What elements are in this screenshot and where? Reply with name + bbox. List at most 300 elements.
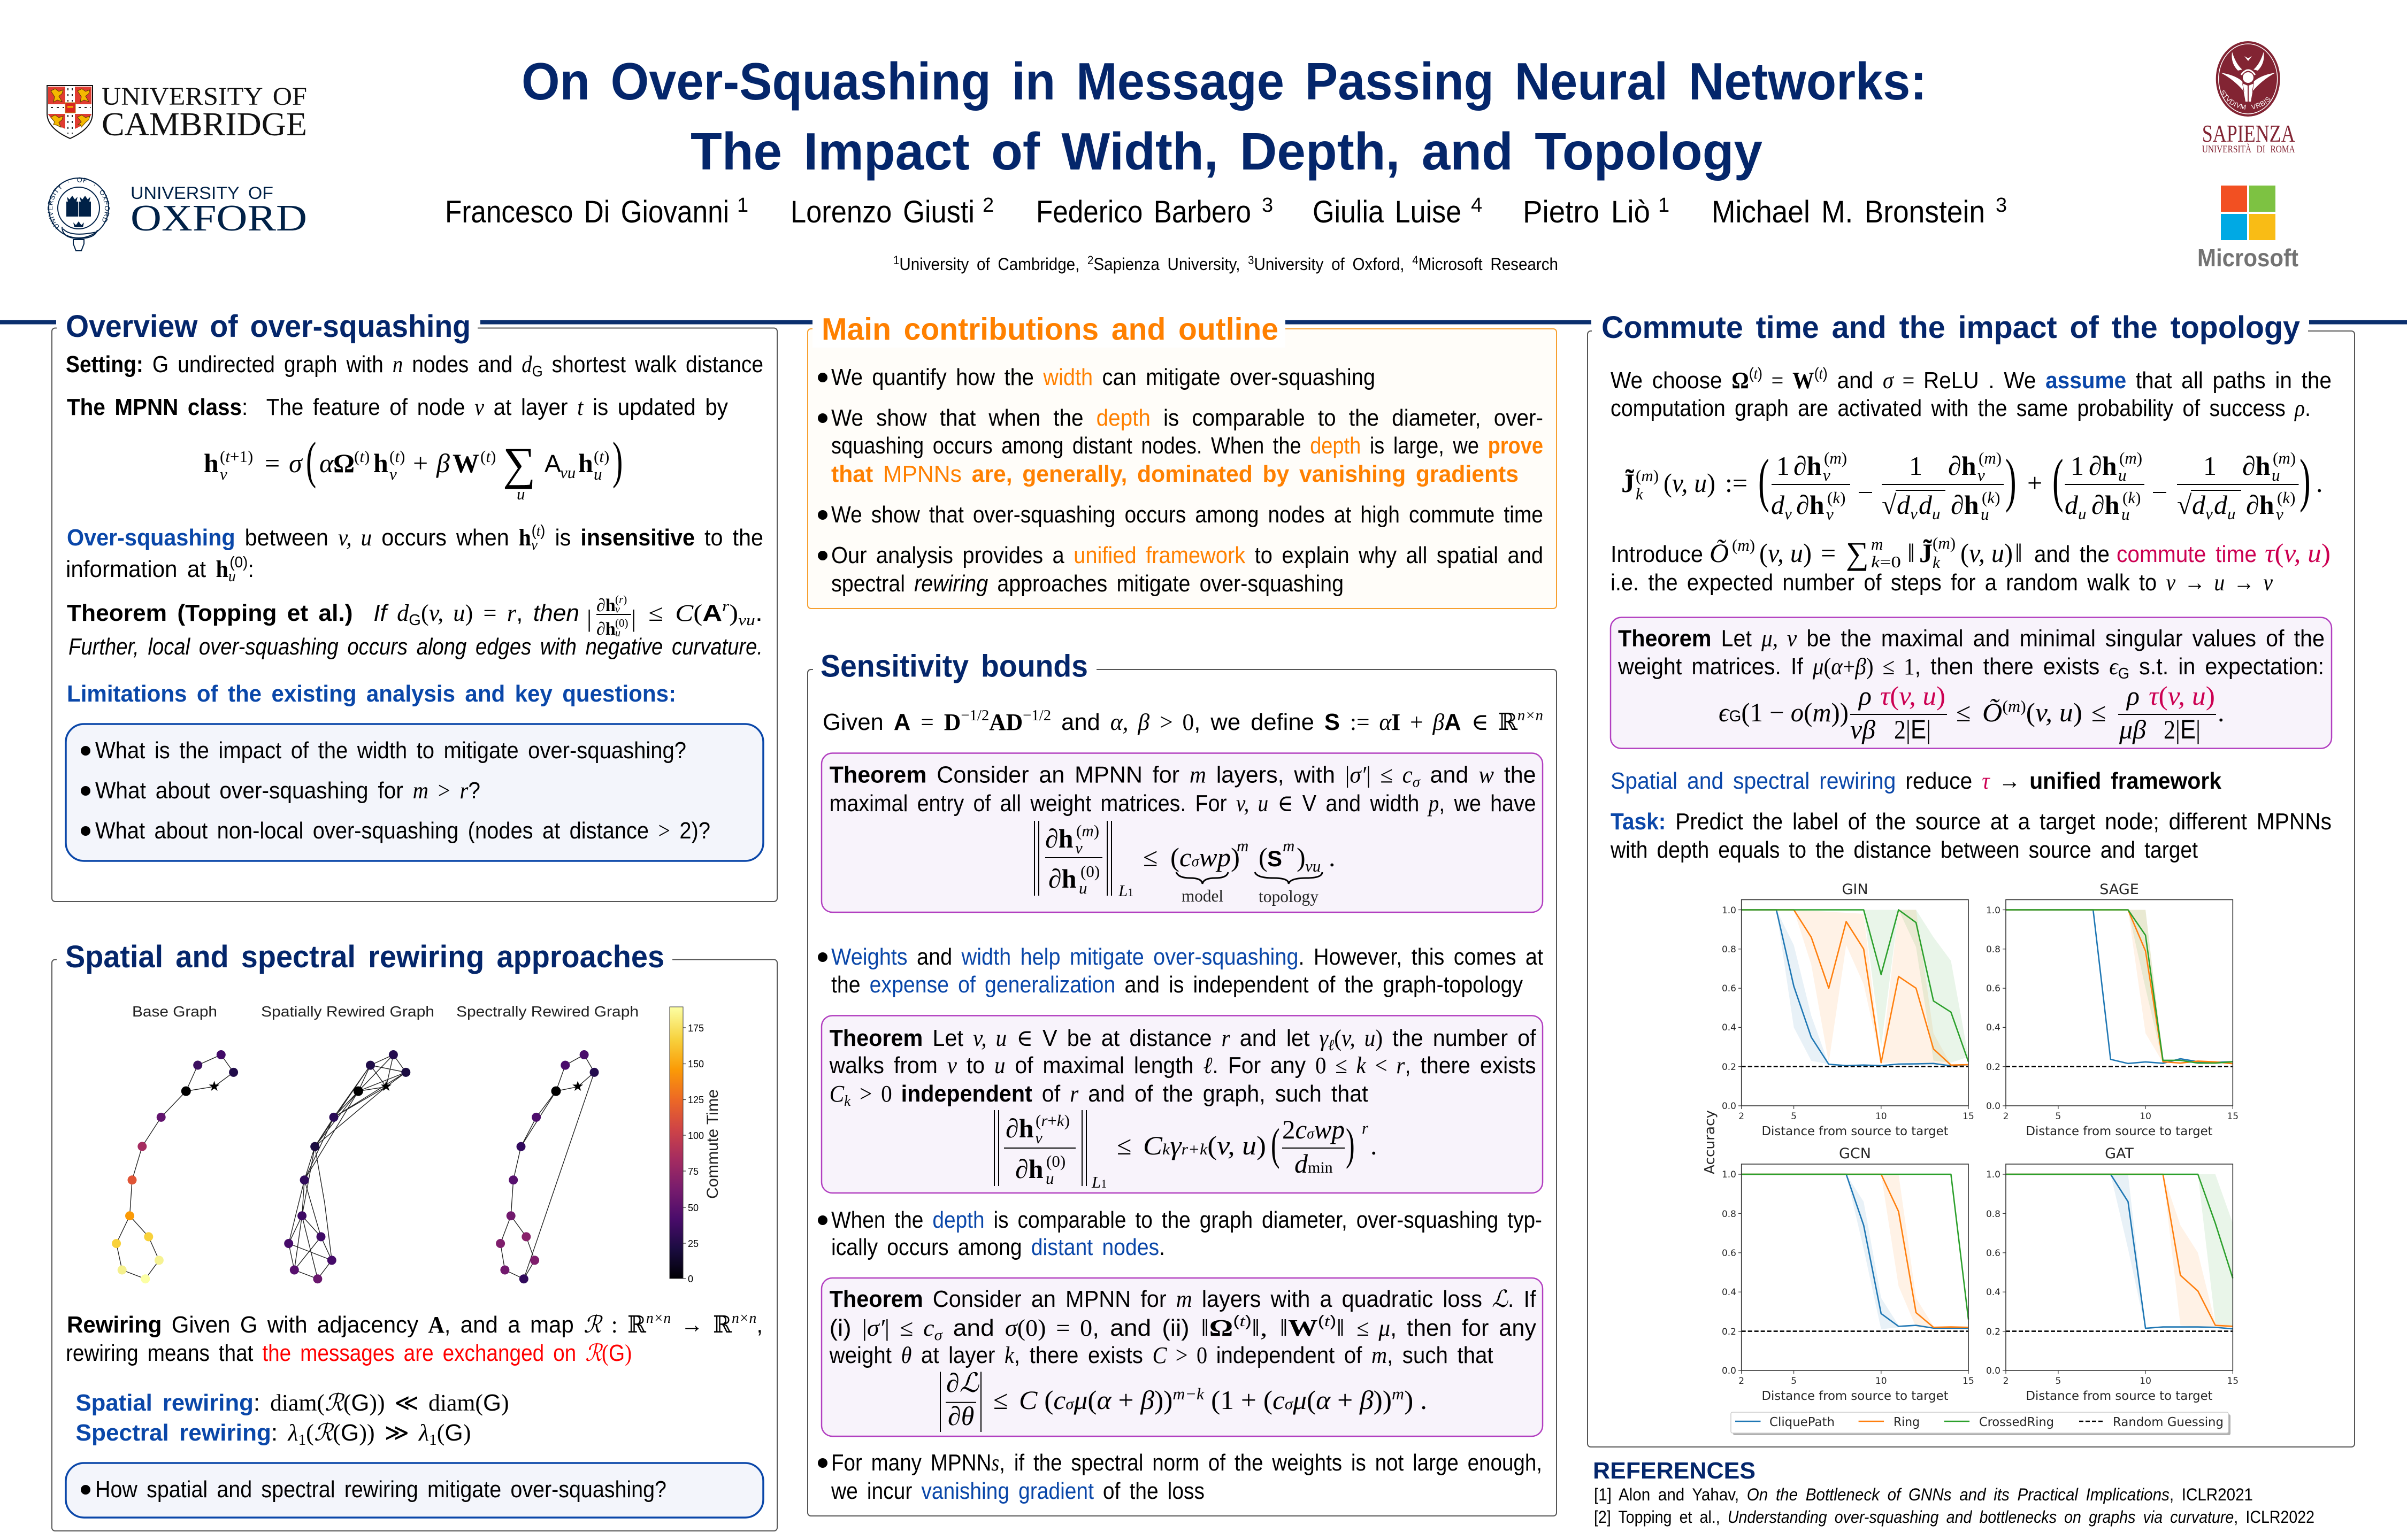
text: theorem of Topping et al.: Theorem (Topping et al.) If dG(v, u) = r, then xyxy=(67,600,579,629)
title: The Impact of Width, Depth, and Topology xyxy=(691,122,1762,181)
formula: symmetrized jacobian: v xyxy=(1910,504,1918,523)
panel: sensitivity bounds xyxy=(808,649,1557,1516)
list: contributions: that MPNNs are, generally, dominated by vanishing gradients xyxy=(831,461,1519,487)
authors: 3 xyxy=(1262,194,1273,217)
text: depth xyxy=(818,1207,1542,1260)
text: weights and width: Weights and width help mitigate over-squashing. However, this comes at xyxy=(831,944,1543,970)
chart: SAGE accuracy: 0.0 xyxy=(1986,1101,2000,1112)
theorem box: vanishing gradient: ‖Ω (t)‖, ‖ W (t)‖ xyxy=(1201,1313,1345,1341)
equation: MPNN update: u xyxy=(517,484,525,503)
text: rewiring definition xyxy=(66,1310,763,1366)
panel: commute time and topology xyxy=(1588,307,2355,1447)
authors: 4 xyxy=(1471,194,1482,217)
authors: 3 xyxy=(1996,194,2007,217)
chart: GCN accuracy: 0.0 xyxy=(1722,1366,1736,1376)
chart: GAT accuracy: 5 xyxy=(2055,1376,2061,1387)
formula: walks bound: L1 xyxy=(1091,1173,1107,1191)
chart: SAGE accuracy: 0.6 xyxy=(1986,983,2000,994)
chart legend xyxy=(1731,1412,2230,1435)
text: theorem of Topping et al.: ∂h xyxy=(596,596,616,615)
panel: overview of over-squashing xyxy=(52,307,777,902)
equation: MPNN update: (t) xyxy=(389,447,405,466)
equation: MPNN update: v xyxy=(220,465,227,483)
formula: width bound: ) xyxy=(1297,842,1306,872)
logo: University of Oxford: UNIVERSITY OF xyxy=(131,183,273,203)
graph: spatially rewired graph xyxy=(261,1003,434,1283)
formula: symmetrized jacobian: J̃ xyxy=(1621,468,1635,498)
formula: gradient bound xyxy=(940,1368,1427,1432)
text: spatial and spectral definitions: Spectral rewiring: λ1(ℛ(G)) ≫ λ1(G) xyxy=(76,1420,471,1449)
chart: GIN accuracy: 0.4 xyxy=(1722,1022,1736,1033)
chart legend: Ring xyxy=(1894,1415,1920,1429)
chart: GAT accuracy: 0.2 xyxy=(1986,1327,2000,1337)
panel: main contributions xyxy=(808,307,1557,609)
formula: gradient bound: ∂ℒ xyxy=(946,1368,979,1398)
chart: SAGE accuracy: 10 xyxy=(2140,1111,2151,1122)
chart: GCN accuracy: 0.4 xyxy=(1722,1287,1736,1298)
text: depth: ically occurs among distant nodes. xyxy=(831,1234,1165,1260)
formula: symmetrized jacobian: v xyxy=(1784,504,1792,523)
formula: commute time bound: ≤ xyxy=(1956,697,1971,727)
chart legend: Random Guessing xyxy=(2113,1415,2224,1429)
formula: commute time bound: ϵG(1 − o(m)) xyxy=(1719,697,1849,727)
equation: MPNN update: A xyxy=(545,450,561,478)
chart: GIN accuracy: Distance from source to target xyxy=(1762,1125,1948,1138)
logo: Sapienza: UNIVERSITÀ DI ROMA xyxy=(2202,143,2295,155)
equation: MPNN update: (t) xyxy=(354,447,370,466)
theorem box: vanishing gradient: weight θ at layer k, there exists C > 0 independent of m, such that xyxy=(829,1342,1493,1368)
text: commute time definition: = xyxy=(1821,538,1836,568)
callout: key questions: What about over-squashing for m > r? xyxy=(95,777,480,804)
callout: key questions: What about non-local over-squashing (nodes at distance > 2)? xyxy=(95,818,710,844)
subheading: limitations: Limitations of the existing analysis and key questions: xyxy=(67,681,676,707)
equation: MPNN update: β xyxy=(436,448,450,478)
list: contributions: We quantify how the width can mitigate over-squashing xyxy=(831,364,1375,390)
formula: symmetrized jacobian: d xyxy=(1897,490,1911,520)
text: commute time definition: (m) xyxy=(1933,534,1956,552)
formula: walks bound: r xyxy=(1362,1119,1369,1137)
chart axis label: accuracy: Accuracy xyxy=(1702,1110,1718,1174)
formula: commute time bound: ≤ xyxy=(2091,697,2106,727)
formula: symmetrized jacobian: (k) xyxy=(1827,488,1845,507)
formula: walks bound: ) xyxy=(1346,1119,1355,1169)
text: weights and width xyxy=(818,944,1543,998)
text: commute time definition xyxy=(1611,534,2331,596)
text: commute time definition: (v, u) xyxy=(1759,538,1812,568)
logo: Microsoft: Microsoft xyxy=(2197,244,2298,272)
graph: spatially rewired graph: Spatially Rewired Graph xyxy=(261,1003,434,1020)
theorem box: walks bound: Ck > 0 independent of r and of the graph, such that xyxy=(830,1081,1368,1110)
formula: symmetrized jacobian: 1 xyxy=(2203,451,2217,481)
text: assumption: We choose Ω(t) = W(t) and σ = ReLU . We assume that all paths in the xyxy=(1611,365,2332,394)
theorem box: walks bound xyxy=(822,1015,1543,1193)
theorem box: vanishing gradient: Theorem Consider an MPNN for m layers with a quadratic loss ℒ. If xyxy=(830,1286,1536,1312)
affiliations: 1University of Cambridge, 2Sapienza University, 3University of Oxford, 4Microsoft Research xyxy=(893,253,1558,274)
list: contributions: spectral rewiring approaches mitigate over-squashing xyxy=(831,571,1344,597)
text: commute time definition: (v, u) xyxy=(1960,538,2013,568)
chart: SAGE accuracy: 0.2 xyxy=(1986,1062,2000,1073)
chart: GAT accuracy: 0.8 xyxy=(1986,1209,2000,1220)
formula: symmetrized jacobian: (m) xyxy=(2273,449,2296,467)
formula: symmetrized jacobian: 1 xyxy=(1776,451,1790,481)
chart: SAGE accuracy xyxy=(1986,881,2239,1138)
formula: symmetrized jacobian: (v, u) xyxy=(1664,468,1715,498)
logo: Sapienza: STVDIVM VRBIS xyxy=(2220,90,2270,110)
formula: symmetrized jacobian: := xyxy=(1725,468,1747,498)
chart: GAT accuracy: 2 xyxy=(2003,1376,2009,1387)
authors: 1 xyxy=(737,194,748,217)
chart: GAT accuracy: 1.0 xyxy=(1986,1169,2000,1180)
equation: MPNN update: = xyxy=(265,448,280,478)
formula: width bound: m xyxy=(1283,836,1294,855)
formula: symmetrized jacobian: d xyxy=(1771,490,1785,520)
colorbar: commute time: 175 xyxy=(688,1023,704,1034)
formula: symmetrized jacobian: ∂h xyxy=(1793,451,1822,481)
text: theorem of Topping et al.: (r) xyxy=(615,593,627,606)
formula: width bound: ∂h xyxy=(1045,823,1074,853)
callout: key questions: What is the impact of the width to mitigate over-squashing? xyxy=(95,737,686,764)
chart: GAT accuracy: 0.6 xyxy=(1986,1248,2000,1259)
chart: GIN accuracy: 0.8 xyxy=(1722,944,1736,955)
formula: symmetrized jacobian: ∂h xyxy=(2246,490,2274,520)
references: [1] Alon and Yahav, On the Bottleneck of GNNs and its Practical Implications, ICLR2021 xyxy=(1594,1485,2253,1504)
chart: GIN accuracy: 2 xyxy=(1738,1111,1744,1122)
chart: SAGE accuracy: 1.0 xyxy=(1986,905,2000,916)
formula: symmetrized jacobian: u xyxy=(1981,505,1989,523)
formula: symmetrized jacobian: ∂h xyxy=(2242,451,2271,481)
title xyxy=(522,52,1927,181)
formula: commute time bound: τ(v, u) xyxy=(1880,681,1945,711)
formula: symmetrized jacobian: d xyxy=(2065,490,2079,520)
chart: SAGE accuracy: 5 xyxy=(2055,1111,2061,1122)
authors: Michael M. Bronstein xyxy=(1712,195,1985,229)
logo: Microsoft xyxy=(2197,186,2298,272)
formula: walks bound: ( xyxy=(1271,1119,1280,1169)
equation: MPNN update: W xyxy=(453,448,479,478)
formula: width bound: (m) xyxy=(1076,821,1099,840)
colorbar: commute time xyxy=(670,1007,722,1284)
formula: symmetrized jacobian: (k) xyxy=(1982,488,2000,507)
equation: MPNN update: ( xyxy=(306,432,316,489)
authors: Pietro Liò xyxy=(1523,195,1650,229)
graph: spatially rewired graph: ★ xyxy=(380,1078,393,1094)
text: theorem of Topping et al. xyxy=(67,593,763,660)
formula: walks bound: ∂h xyxy=(1015,1154,1044,1184)
equation: MPNN update: ) xyxy=(612,432,623,489)
formula: symmetrized jacobian: + xyxy=(2027,468,2042,498)
text: theorem of Topping et al.: Further, local over-squashing occurs along edges with negative curvature. xyxy=(68,634,763,660)
formula: symmetrized jacobian: v xyxy=(1826,505,1834,523)
text: over-squashing definition: Over-squashing between v, u occurs when hv(t) is insensitive to the xyxy=(67,522,763,553)
chart: GCN accuracy: 0.6 xyxy=(1722,1248,1736,1259)
text: assumption xyxy=(1611,365,2332,421)
text: commute time definition: ‖ xyxy=(1907,538,1915,568)
formula: symmetrized jacobian: (m) xyxy=(1636,466,1659,485)
theorem box: walks bound: walks from v to u of maximal length ℓ. For any 0 ≤ k < r, there exists xyxy=(829,1052,1536,1079)
text: task: Task: Predict the label of the source at a target node; different MPNNs xyxy=(1611,808,2332,835)
chart: SAGE accuracy: 0.8 xyxy=(1986,944,2000,955)
formula: width bound: . xyxy=(1329,842,1335,872)
formula: commute time bound: ρ xyxy=(2126,681,2140,711)
chart: GIN accuracy: 0.6 xyxy=(1722,983,1736,994)
formula: width bound: m xyxy=(1237,836,1248,855)
chart legend: CrossedRing xyxy=(1979,1415,2054,1429)
colorbar: commute time: 125 xyxy=(688,1095,704,1105)
text: rewiring definition: Rewiring Given G with adjacency A, and a map ℛ : ℝn×n → ℝn×n, xyxy=(67,1310,763,1338)
colorbar: commute time: 100 xyxy=(688,1130,704,1141)
formula: walks bound: ∂h xyxy=(1006,1113,1034,1143)
text: commute time definition: τ(v, u) xyxy=(2265,538,2331,568)
formula: width bound: topology xyxy=(1259,887,1319,906)
chart: GAT accuracy: 0.4 xyxy=(1986,1287,2000,1298)
graph: spectrally rewired graph: Spectrally Rewired Graph xyxy=(456,1003,639,1020)
chart: SAGE accuracy: 0.4 xyxy=(1986,1022,2000,1033)
text: commute time definition: ‖ xyxy=(2015,538,2022,568)
formula: symmetrized jacobian: ) xyxy=(2299,447,2311,513)
authors xyxy=(445,194,2007,229)
list: contributions: squashing occurs among distant nodes. When the depth is large, we prove xyxy=(831,433,1543,459)
formula: symmetrized jacobian: k xyxy=(1636,484,1644,503)
text: theorem of Topping et al.: (0) xyxy=(615,617,628,629)
chart: GIN accuracy: 0.0 xyxy=(1722,1101,1736,1112)
formula: commute time bound: νβ xyxy=(1850,714,1875,744)
text: spatial and spectral definitions xyxy=(76,1390,509,1449)
formula: symmetrized jacobian: (m) xyxy=(2119,449,2142,467)
formula: symmetrized jacobian: u xyxy=(2227,504,2236,523)
formula: width bound xyxy=(1034,821,1335,906)
formula: symmetrized jacobian: u xyxy=(2078,504,2086,523)
chart legend: CliquePath xyxy=(1769,1415,1835,1429)
formula: symmetrized jacobian: ( xyxy=(1758,447,1769,513)
equation: MPNN update: h xyxy=(578,448,593,478)
authors: Lorenzo Giusti xyxy=(791,195,975,229)
formula: gradient bound: C (cσμ(α + β))m−k (1 + (cσμ(α + β))m) . xyxy=(1019,1384,1427,1415)
formula: commute time bound: 2|E| xyxy=(2164,714,2201,744)
chart: GCN accuracy: 10 xyxy=(1875,1376,1887,1387)
equation: MPNN update: + xyxy=(413,448,428,478)
title: On Over-Squashing in Message Passing Neural Networks: xyxy=(522,52,1927,111)
chart: SAGE accuracy: 2 xyxy=(2003,1111,2009,1122)
chart: GCN accuracy: 15 xyxy=(1963,1376,1974,1387)
list: contributions: We show that when the depth is comparable to the diameter, over- xyxy=(831,405,1543,431)
references xyxy=(1593,1458,2314,1527)
panel: spatial and spectral rewiring xyxy=(52,938,777,1531)
formula: symmetrized jacobian: (k) xyxy=(2122,488,2141,507)
authors: Giulia Luise xyxy=(1313,195,1461,229)
formula: symmetrized jacobian: d xyxy=(1919,490,1933,520)
graph: base graph: Base Graph xyxy=(132,1003,217,1020)
formula: symmetrized jacobian: ∂h xyxy=(2091,490,2120,520)
formula: symmetrized jacobian: ( xyxy=(2052,447,2064,513)
authors: 1 xyxy=(1658,194,1669,217)
chart: GIN accuracy: 5 xyxy=(1791,1111,1797,1122)
formula: walks bound: 2cσwp xyxy=(1282,1114,1345,1144)
formula: symmetrized jacobian: v xyxy=(1823,466,1830,484)
text: commute time definition: i.e. the expected number of steps for a random walk to v → u → v xyxy=(1611,569,2273,596)
chart: GCN accuracy: 0.2 xyxy=(1722,1327,1736,1337)
text: weights and width: the expense of generalization and is independent of the graph-topology xyxy=(831,972,1523,998)
theorem box: vanishing gradient xyxy=(822,1278,1543,1436)
text: task: with depth equals to the distance between source and target xyxy=(1610,837,2198,863)
logo: Sapienza xyxy=(2202,41,2295,155)
heading: main contributions: Main contributions and outline xyxy=(822,312,1278,346)
equation: MPNN update: σ xyxy=(289,448,303,478)
logo: University of Oxford: UNIVERSITY · OF · OXFORD xyxy=(48,178,110,229)
formula: width bound: (0) xyxy=(1080,862,1100,881)
chart: SAGE accuracy: 15 xyxy=(2227,1111,2239,1122)
formula: symmetrized jacobian: 1 xyxy=(1909,451,1922,481)
text: commute time definition: Introduce xyxy=(1611,541,1703,567)
formula: walks bound: . xyxy=(1370,1130,1377,1160)
formula: walks bound: (r+k) xyxy=(1036,1111,1070,1130)
chart: GIN accuracy: 10 xyxy=(1875,1111,1887,1122)
logo: University of Oxford xyxy=(48,178,307,251)
colorbar: commute time: 50 xyxy=(688,1203,699,1213)
authors: Federico Barbero xyxy=(1036,195,1251,229)
formula: width bound: L1 xyxy=(1118,881,1133,900)
text: theorem of Topping et al.: u xyxy=(615,627,620,639)
authors: 2 xyxy=(983,194,994,217)
formula: symmetrized jacobian: 1 xyxy=(2071,451,2084,481)
chart: GCN accuracy: GCN xyxy=(1839,1145,1871,1162)
formula: symmetrized jacobian: v xyxy=(2276,505,2283,523)
equation: MPNN update: ∑ xyxy=(503,438,535,489)
text: task xyxy=(1610,808,2332,863)
text: theorem of Topping et al.: v xyxy=(615,604,620,615)
formula: commute time bound: μβ xyxy=(2119,714,2146,744)
formula: width bound: ( xyxy=(1259,842,1268,872)
formula: width bound: model xyxy=(1182,886,1223,905)
equation: MPNN update: (t) xyxy=(480,447,496,466)
chart: GCN accuracy: Distance from source to target xyxy=(1762,1389,1948,1403)
equation: MPNN update xyxy=(204,432,623,503)
formula: walks bound: u xyxy=(1046,1169,1054,1188)
text: theorem of Topping et al.: | xyxy=(631,605,636,632)
formula: symmetrized jacobian: . xyxy=(2316,468,2322,498)
formula: symmetrized jacobian: d xyxy=(2214,490,2228,520)
text: commute time definition: commute time xyxy=(2117,541,2257,567)
text: vanishing gradient remark: we incur vanishing gradient of the loss xyxy=(831,1478,1205,1504)
equation: MPNN update: (t+1) xyxy=(220,447,253,466)
theorem box: width bound: Theorem Consider an MPNN for m layers, with |σ′| ≤ cσ and w the xyxy=(830,761,1536,790)
logo: University of Cambridge xyxy=(47,82,307,143)
formula: symmetrized jacobian: u xyxy=(1932,504,1941,523)
list: contributions xyxy=(818,364,1543,597)
theorem box: commute time bound: Theorem Let μ, ν be the maximal and minimal singular values of the xyxy=(1618,626,2325,652)
formula: gradient bound: ≤ xyxy=(993,1385,1008,1415)
formula: width bound: (cσwp) xyxy=(1170,842,1240,872)
colorbar: commute time: 150 xyxy=(688,1059,704,1069)
equation: MPNN update: α xyxy=(319,448,334,478)
text: definition of S: Given A = D−1/2AD−1/2 and α, β > 0, we define S := αI + βA ∈ ℝn×n xyxy=(823,707,1543,735)
chart: GIN accuracy: 0.2 xyxy=(1722,1062,1736,1073)
formula: symmetrized jacobian: u xyxy=(2121,505,2130,523)
chart: GIN accuracy: GIN xyxy=(1842,881,1868,898)
formula: commute time bound: 2|E| xyxy=(1894,714,1931,744)
logo: University of Cambridge: UNIVERSITY OF xyxy=(102,82,307,111)
chart: GCN accuracy xyxy=(1722,1145,1974,1403)
heading: overview: Overview of over-squashing xyxy=(66,309,471,344)
text: vanishing gradient remark xyxy=(818,1450,1542,1504)
text: rewiring definition: rewiring means that the messages are exchanged on ℛ(G) xyxy=(66,1340,632,1366)
equation: MPNN update: Ω xyxy=(333,448,355,478)
graph: spectrally rewired graph: ★ xyxy=(571,1078,584,1094)
text: commute time definition: (m) xyxy=(1732,536,1755,555)
logo: University of Oxford: OXFORD xyxy=(131,198,307,239)
formula: symmetrized jacobian: ∂h xyxy=(2089,451,2117,481)
formula: width bound: ≤ xyxy=(1143,842,1157,872)
formula: width bound: v xyxy=(1075,838,1083,857)
chart: GAT accuracy xyxy=(1986,1145,2239,1403)
logo: Sapienza: SAPIENZA xyxy=(2202,120,2295,147)
formula: width bound: ∂h xyxy=(1048,864,1077,894)
formula: symmetrized jacobian: ∂h xyxy=(1948,451,1976,481)
formula: symmetrized jacobian: d xyxy=(2192,490,2206,520)
chart: GAT accuracy: 15 xyxy=(2227,1376,2239,1387)
theorem box: vanishing gradient: ≤ μ, then for any xyxy=(1356,1315,1536,1341)
text: commute time definition: m xyxy=(1871,535,1883,553)
theorem box: width bound: maximal entry of all weight matrices. For v, u ∈ V and width p, we have xyxy=(830,790,1536,817)
formula: width bound: u xyxy=(1079,879,1087,897)
chart: GIN accuracy: 15 xyxy=(1963,1111,1974,1122)
formula: symmetrized jacobian: v xyxy=(2205,504,2213,523)
formula: commute time bound xyxy=(1719,681,2224,744)
formula: walks bound xyxy=(994,1110,1377,1191)
theorem box: vanishing gradient: (i) |σ′| ≤ cσ and σ(0) = 0, and (ii) xyxy=(830,1315,1190,1344)
formula: width bound: vu xyxy=(1305,857,1321,875)
formula: width bound: S xyxy=(1267,846,1282,871)
chart: GCN accuracy: 0.8 xyxy=(1722,1209,1736,1220)
chart: GCN accuracy: 2 xyxy=(1738,1376,1744,1387)
chart: GIN accuracy: 1.0 xyxy=(1722,905,1736,916)
text: commute time definition: ∑ xyxy=(1846,536,1869,571)
text: MPNN class: The MPNN class: The feature of node v at layer t is updated by xyxy=(67,394,728,420)
text: over-squashing definition xyxy=(66,522,763,585)
equation: MPNN update: h xyxy=(373,448,388,478)
chart: GAT accuracy: GAT xyxy=(2105,1145,2134,1162)
text: commute time definition: Õ xyxy=(1710,538,1729,568)
formula: walks bound: ≤ xyxy=(1117,1130,1131,1160)
text: assumption: computation graph are activated with the same probability of success ρ. xyxy=(1611,395,2311,421)
list: contributions: We show that over-squashing occurs among nodes at high commute time xyxy=(831,502,1543,528)
formula: walks bound: Ckγr+k(v, u) xyxy=(1143,1130,1266,1160)
callout: rewiring question: How spatial and spectral rewiring mitigate over-squashing? xyxy=(95,1476,666,1503)
formula: walks bound: (0) xyxy=(1046,1152,1065,1171)
authors: Francesco Di Giovanni xyxy=(445,195,729,229)
formula: walks bound: dmin xyxy=(1294,1149,1333,1179)
chart: GAT accuracy: 10 xyxy=(2140,1376,2151,1387)
text: over-squashing definition: information at hu(0): xyxy=(66,554,254,585)
graph: spectrally rewired graph xyxy=(456,1003,639,1283)
chart: GCN accuracy: 5 xyxy=(1791,1376,1797,1387)
formula: commute time bound: . xyxy=(2218,697,2224,727)
formula: commute time bound: τ(v, u) xyxy=(2149,681,2215,711)
chart: GIN accuracy xyxy=(1722,881,1974,1138)
references: [2] Topping et al., Understanding over-squashing and bottlenecks on graphs via curvature, ICLR2022 xyxy=(1594,1507,2314,1527)
chart: GAT accuracy: Distance from source to target xyxy=(2026,1389,2212,1403)
references: REFERENCES xyxy=(1593,1458,1756,1484)
formula: symmetrized jacobian: (k) xyxy=(2277,488,2295,507)
formula: symmetrized jacobian: ∂h xyxy=(1951,490,1979,520)
formula: gradient bound: ∂θ xyxy=(948,1401,974,1431)
equation: MPNN update: h xyxy=(204,448,219,478)
equation: MPNN update: u xyxy=(594,465,602,483)
text: commute time definition: k=0 xyxy=(1871,552,1901,571)
text: theorem of Topping et al.: | xyxy=(587,605,592,632)
heading: commute time: Commute time and the impact of the topology xyxy=(1601,310,2300,345)
theorem box: commute time bound xyxy=(1611,618,2332,749)
chart: SAGE accuracy: SAGE xyxy=(2099,881,2139,898)
